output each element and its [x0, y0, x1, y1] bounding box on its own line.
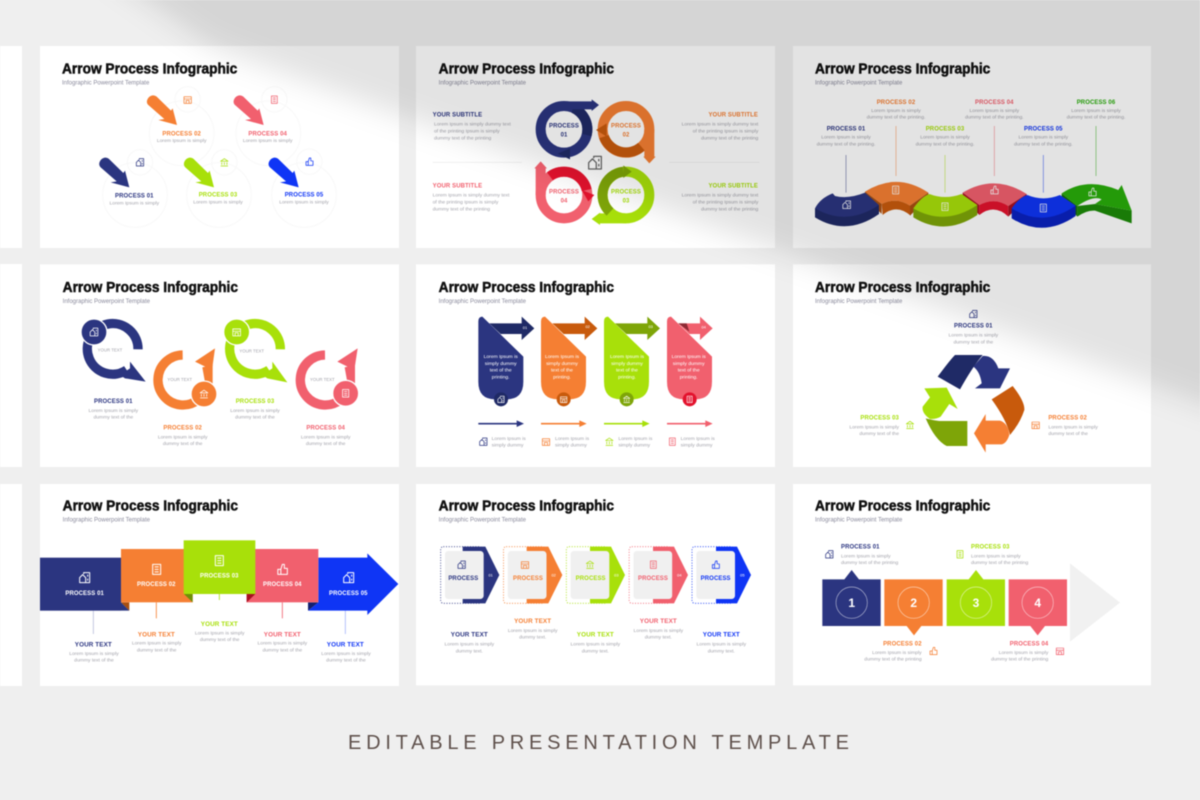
process 04 text: dummy text of the printing — [991, 657, 1049, 663]
circular arrow 02 — [596, 106, 656, 163]
lower text blocks: dummy text of the — [74, 658, 114, 664]
bottom texts: Lorem Ipsum is — [618, 436, 653, 442]
labels: dummy text of the — [306, 441, 346, 447]
banner pink — [247, 549, 318, 602]
lower text blocks: YOUR TEXT — [451, 631, 488, 638]
chevron 02: 02 — [551, 573, 557, 578]
lower text blocks: Lorem Ipsum is simply — [258, 641, 308, 647]
panel: slide 7 stepped banner arrow — [40, 484, 399, 686]
panel: cropped left slide row 1 — [0, 46, 22, 248]
labels: YOUR TEXT — [167, 377, 192, 382]
subtitle: Infographic Powerpoint Template — [439, 80, 527, 86]
process 03 text: PROCESS 03 — [971, 544, 1010, 550]
labels: PROCESS 02 — [877, 100, 916, 106]
labels: Lorem Ipsum is simply — [230, 408, 280, 414]
tag texts: text of the — [490, 368, 512, 374]
labels: PROCESS 02 — [163, 425, 203, 431]
lower text blocks: Lorem Ipsum is simply — [195, 630, 245, 636]
circular arrow 01 — [541, 99, 599, 159]
labels: dummy text of the printing. — [916, 142, 974, 148]
block 2: 2 — [910, 596, 917, 610]
lower text blocks: Lorem Ipsum is simply — [634, 628, 684, 634]
panel: slide 5 tag arrows — [416, 264, 775, 467]
subtitle: Infographic Powerpoint Template — [63, 518, 151, 524]
bottom texts: Lorem Ipsum is — [492, 436, 526, 442]
process 01 text — [826, 544, 899, 566]
chevron 02: PROCESS — [513, 576, 543, 582]
subtitle: Infographic Powerpoint Template — [62, 80, 150, 86]
tag 01: 01 — [523, 325, 528, 330]
title: Arrow Process Infographic — [63, 279, 238, 296]
tag 03: 03 — [648, 324, 654, 329]
title: Arrow Process Infographic — [439, 498, 614, 515]
banner green — [184, 540, 255, 594]
labels: dummy text of the printing. — [817, 142, 875, 148]
lower text blocks: Lorem Ipsum is simply — [445, 641, 495, 647]
tag texts: text of the — [678, 368, 700, 374]
lower text blocks: YOUR TEXT — [577, 631, 614, 638]
bottom texts: simply dummy — [681, 443, 713, 449]
left subtitle 01: YOUR SUBTITLE — [433, 113, 482, 119]
left subtitle 04: dummy text of the printing — [433, 206, 490, 212]
subtitle: Infographic Powerpoint Template — [815, 518, 903, 524]
tag texts: printing. — [680, 375, 698, 381]
segment icons — [843, 186, 1096, 212]
icons — [136, 96, 313, 166]
right subtitle 03 — [682, 184, 759, 212]
tag texts: printing. — [618, 375, 636, 381]
right subtitle 03: of the printing Ipsum is simply — [693, 199, 759, 205]
chevron 03: 03 — [614, 573, 619, 578]
labels: YOUR TEXT — [239, 349, 264, 354]
panel: cropped left slide row 2 — [0, 264, 22, 467]
panel: slide 1 circles with diagonal arrows — [40, 46, 399, 248]
lower text blocks: YOUR TEXT — [327, 641, 364, 648]
blue fold — [308, 602, 318, 611]
process 01 text: Lorem Ipsum is simply — [841, 553, 891, 559]
left subtitle 01: Lorem Ipsum is simply dummy text — [434, 122, 511, 128]
block 1: 1 — [848, 596, 855, 610]
lower text blocks: Lorem Ipsum is simply — [69, 651, 119, 657]
chevron 04 — [629, 547, 688, 603]
left subtitle 04: of the printing Ipsum is simply — [433, 199, 499, 205]
thin arrows — [478, 420, 713, 427]
chevron 01 — [441, 547, 499, 603]
labels: Lorem Ipsum is simply — [970, 108, 1020, 114]
tag 03 — [604, 317, 660, 406]
panel: slide 8 dotted chevrons — [416, 484, 775, 685]
right subtitle 02: dummy text of the printing — [701, 135, 759, 141]
labels: PROCESS 04 — [306, 425, 346, 431]
dividers — [433, 161, 759, 163]
title: Arrow Process Infographic — [815, 498, 990, 515]
panel: slide 2 circular arrows — [416, 46, 775, 248]
tag texts: Lorem Ipsum is — [484, 354, 518, 360]
chevron 04: PROCESS — [638, 576, 668, 582]
labels: dummy text of the printing. — [867, 115, 925, 121]
chevron 02 — [503, 547, 562, 603]
lower text blocks: Lorem Ipsum is simply — [321, 651, 371, 657]
title: Arrow Process Infographic — [815, 60, 990, 77]
labels: Lorem Ipsum is simply — [157, 138, 207, 144]
left subtitle 04: YOUR SUBTITLE — [433, 184, 482, 190]
labels: dummy text of the printing. — [1067, 115, 1125, 121]
right subtitle 03: YOUR SUBTITLE — [708, 184, 758, 190]
labels: YOUR TEXT — [98, 348, 123, 353]
labels: Lorem Ipsum is simply — [89, 408, 139, 414]
lower text blocks: dummy text. — [519, 635, 546, 641]
labels: PROCESS 04 — [975, 100, 1014, 106]
panel: slide 4 looping arrows — [40, 264, 399, 467]
lower text blocks: dummy text. — [645, 635, 672, 641]
process 02 block: dummy text of the — [1048, 431, 1088, 437]
process 03 arrow — [184, 158, 214, 187]
labels: PROCESS 03 — [236, 399, 275, 405]
tag texts: text of the — [551, 368, 573, 374]
circle labels: PROCESS — [611, 124, 641, 130]
banner labels: PROCESS 05 — [329, 591, 368, 597]
labels: dummy text of the — [163, 441, 203, 447]
tag 04: 04 — [701, 324, 707, 329]
labels: Lorem Ipsum is simply — [1019, 135, 1069, 141]
process 02 arrow — [147, 95, 177, 125]
banner icons — [80, 556, 354, 583]
process 01 arrow — [99, 158, 129, 187]
lower text blocks: dummy text of the — [326, 658, 366, 664]
right subtitle 03: Lorem Ipsum is simply dummy text — [682, 193, 759, 199]
process 03 block — [849, 415, 914, 437]
lower text blocks — [69, 621, 371, 664]
lower text blocks: dummy text of the — [263, 647, 302, 653]
3D segment 01 — [815, 193, 879, 226]
lower text blocks: dummy text. — [708, 648, 735, 654]
right subtitle 03: dummy text of the printing — [701, 206, 759, 212]
process 01 text: PROCESS 01 — [841, 544, 880, 550]
right subtitle 02: of the printing Ipsum is simply — [693, 128, 759, 134]
process 04 text — [991, 641, 1064, 663]
panel: cropped left slide row 3 — [0, 484, 22, 686]
labels — [817, 100, 1125, 148]
process 03 text: dummy text of the printing — [971, 560, 1029, 566]
process 01 block: Lorem Ipsum is simply — [949, 333, 999, 339]
3D segment 05 — [1012, 195, 1076, 228]
bottom texts: Lorem Ipsum is — [555, 436, 590, 442]
labels: Lorem Ipsum is simply — [279, 199, 329, 205]
labels: dummy text of the printing. — [965, 115, 1024, 121]
block 2 — [884, 579, 943, 635]
3D arrow 06 — [1062, 184, 1132, 223]
labels: YOUR TEXT — [310, 377, 335, 382]
tag texts: Lorem Ipsum is — [672, 354, 706, 360]
title: Arrow Process Infographic — [439, 279, 614, 296]
circular arrow 04 — [534, 161, 594, 218]
labels: PROCESS 06 — [1077, 100, 1116, 106]
chevron 03 — [566, 547, 625, 603]
tag 02 — [541, 317, 597, 406]
process 01 block — [949, 310, 999, 345]
process 01 block: PROCESS 01 — [954, 324, 993, 330]
lower text blocks: Lorem Ipsum is simply — [571, 641, 621, 647]
banner navy — [40, 558, 129, 611]
chevron 05: PROCESS — [701, 576, 731, 582]
process 01 block: dummy text of the — [954, 339, 993, 345]
title: Arrow Process Infographic — [815, 279, 990, 296]
recycle green — [923, 388, 967, 446]
panel: slide 3 3D wave arrow — [793, 46, 1151, 248]
left subtitle 01 — [433, 113, 511, 141]
process 02 block — [1032, 415, 1098, 437]
left subtitle 01: of the printing Ipsum is simply — [434, 128, 500, 134]
panel: slide 9 numbered blocks — [793, 484, 1151, 685]
left subtitle 04 — [433, 184, 510, 212]
bottom texts: Lorem Ipsum is — [681, 436, 715, 442]
lower text blocks: Lorem Ipsum is simply — [697, 641, 747, 647]
labels: PROCESS 01 — [827, 127, 866, 133]
tag texts — [484, 354, 706, 381]
3D segment 04 — [963, 183, 1027, 217]
lower text blocks: dummy text. — [582, 648, 609, 654]
right subtitle 02: YOUR SUBTITLE — [708, 113, 758, 119]
lower text blocks: YOUR TEXT — [514, 618, 551, 625]
labels: PROCESS 03 — [926, 127, 965, 133]
circle labels — [549, 124, 641, 204]
process 03 block: dummy text of the — [859, 431, 899, 437]
tag texts: simply dummy — [611, 361, 643, 367]
labels: Lorem Ipsum is simply — [871, 108, 921, 114]
labels: PROCESS 03 — [199, 193, 238, 199]
process 02 block: PROCESS 02 — [1048, 415, 1087, 421]
process 01 text: dummy text of the printing — [841, 560, 899, 566]
block 1 — [822, 570, 881, 626]
tag texts: Lorem Ipsum is — [610, 354, 645, 360]
subtitle: Infographic Powerpoint Template — [439, 299, 527, 305]
subtitle: Infographic Powerpoint Template — [63, 299, 151, 305]
labels: Lorem Ipsum is simply — [920, 135, 970, 141]
left subtitle 04: Lorem Ipsum is simply dummy text — [433, 193, 510, 199]
bottom texts: simply dummy — [492, 443, 524, 449]
circle labels: PROCESS — [611, 189, 641, 195]
tag texts: printing. — [492, 375, 510, 381]
process 02 block: Lorem Ipsum is simply — [1048, 424, 1098, 430]
tag texts: printing. — [553, 375, 571, 381]
circle labels: 03 — [623, 198, 630, 204]
circle labels: 04 — [561, 198, 568, 204]
loop arrow 04 — [300, 348, 359, 406]
tag texts: simply dummy — [673, 361, 705, 367]
process 02 text — [864, 641, 937, 663]
block 3: 3 — [973, 596, 980, 610]
tag texts: text of the — [616, 368, 638, 374]
loop arrow 02 — [158, 348, 217, 407]
process 03 text — [957, 544, 1029, 566]
labels — [110, 131, 329, 206]
tag texts: simply dummy — [485, 361, 517, 367]
labels: PROCESS 01 — [94, 399, 133, 405]
tag texts: Lorem Ipsum is — [545, 354, 580, 360]
labels: Lorem Ipsum is simply — [158, 434, 208, 440]
bottom icons — [480, 438, 675, 445]
labels: Lorem Ipsum is simply — [1071, 108, 1121, 114]
process 02 text: dummy text of the printing — [864, 657, 922, 663]
labels: dummy text of the printing. — [1014, 142, 1073, 148]
lower text blocks: dummy text. — [456, 648, 483, 654]
title: Arrow Process Infographic — [439, 60, 614, 77]
banner labels: PROCESS 01 — [65, 591, 105, 597]
stems — [846, 126, 1096, 193]
3D segment 03 — [913, 194, 977, 226]
lower text blocks: YOUR TEXT — [703, 631, 740, 638]
lower text blocks: Lorem Ipsum is simply — [508, 628, 558, 634]
block 3 — [947, 570, 1005, 626]
bottom texts: simply dummy — [555, 443, 587, 449]
labels: Lorem Ipsum is simply — [110, 200, 160, 206]
labels: PROCESS 05 — [285, 193, 324, 199]
circle labels: 01 — [561, 133, 568, 139]
block 4: 4 — [1034, 596, 1041, 610]
right subtitle 02 — [682, 113, 759, 141]
panel: slide 6 recycling arrows — [793, 264, 1151, 467]
subtitle: Infographic Powerpoint Template — [439, 518, 527, 524]
process 04 text: PROCESS 04 — [1010, 641, 1049, 647]
left subtitle 01: dummy text of the printing — [434, 135, 492, 141]
process 03 block: Lorem Ipsum is simply — [849, 424, 899, 430]
labels: PROCESS 01 — [115, 194, 154, 200]
title: Arrow Process Infographic — [62, 60, 237, 77]
lower text blocks — [445, 618, 747, 654]
caption: EDITABLE PRESENTATION TEMPLATE — [348, 732, 849, 754]
recycle navy — [938, 355, 1010, 389]
faint circle outlines — [103, 87, 336, 227]
chevron 04: 04 — [677, 573, 682, 578]
stems — [93, 594, 345, 634]
labels: Lorem Ipsum is simply — [301, 434, 351, 440]
circle labels: 02 — [623, 133, 630, 139]
labels: PROCESS 04 — [248, 131, 288, 137]
banner labels: PROCESS 03 — [200, 574, 239, 580]
lower text blocks: Lorem Ipsum is simply — [132, 641, 182, 647]
tag 01 — [478, 317, 534, 406]
block 4 — [1009, 579, 1067, 635]
process 04 text: Lorem Ipsum is simply — [999, 650, 1049, 656]
tag 04 — [667, 317, 713, 406]
lower text blocks: YOUR TEXT — [264, 631, 301, 638]
labels: PROCESS 02 — [162, 131, 202, 137]
right subtitle 02: Lorem Ipsum is simply dummy text — [682, 122, 759, 128]
banner labels: PROCESS 04 — [263, 582, 302, 588]
folds — [184, 594, 255, 602]
tag texts: simply dummy — [546, 361, 578, 367]
subtitle: Infographic Powerpoint Template — [815, 80, 903, 86]
chevron 01: PROCESS — [448, 576, 478, 582]
labels: Lorem Ipsum is simply — [821, 135, 871, 141]
process 02 text: Lorem Ipsum is simply — [872, 650, 922, 656]
bottom texts — [492, 436, 715, 449]
labels: dummy text of the — [235, 415, 275, 421]
labels: PROCESS 05 — [1024, 127, 1063, 133]
labels: Lorem Ipsum is simply — [243, 138, 293, 144]
subtitle: Infographic Powerpoint Template — [815, 299, 903, 305]
bottom texts: simply dummy — [618, 443, 651, 449]
lower text blocks: YOUR TEXT — [201, 621, 238, 628]
lower text blocks: YOUR TEXT — [138, 631, 175, 638]
loop arrow 01 — [81, 319, 146, 382]
banner blue arrow — [308, 553, 398, 615]
chevron 05 — [692, 547, 751, 603]
banner labels — [65, 574, 368, 597]
tag 02: 02 — [585, 324, 591, 329]
process 03 text: Lorem Ipsum is simply — [971, 553, 1021, 559]
process 02 text: PROCESS 02 — [883, 641, 922, 647]
chevron 03: PROCESS — [576, 576, 606, 582]
banner orange — [121, 549, 193, 602]
recycle orange — [974, 386, 1024, 453]
center icon — [589, 156, 601, 169]
chevron 01: 01 — [488, 573, 494, 578]
circular arrow 03 — [592, 165, 649, 225]
background arrow — [1070, 563, 1120, 642]
banner labels: PROCESS 02 — [137, 582, 176, 588]
lower text blocks: YOUR TEXT — [640, 618, 677, 625]
process 03 block: PROCESS 03 — [860, 415, 900, 421]
3D segment 02 — [865, 182, 928, 216]
lower text blocks: dummy text of the — [200, 637, 240, 643]
process 04 arrow — [234, 95, 264, 125]
loop arrow 03 — [224, 319, 287, 382]
process 05 arrow — [269, 158, 299, 187]
title: Arrow Process Infographic — [63, 498, 238, 515]
lower text blocks: YOUR TEXT — [75, 641, 112, 648]
chevron 05: 05 — [740, 573, 745, 578]
circle labels: PROCESS — [549, 124, 579, 130]
labels: Lorem Ipsum is simply — [193, 199, 243, 205]
labels — [89, 348, 351, 447]
circle labels: PROCESS — [549, 189, 579, 195]
lower text blocks: dummy text of the — [137, 647, 177, 653]
labels: dummy text of the — [94, 415, 133, 421]
